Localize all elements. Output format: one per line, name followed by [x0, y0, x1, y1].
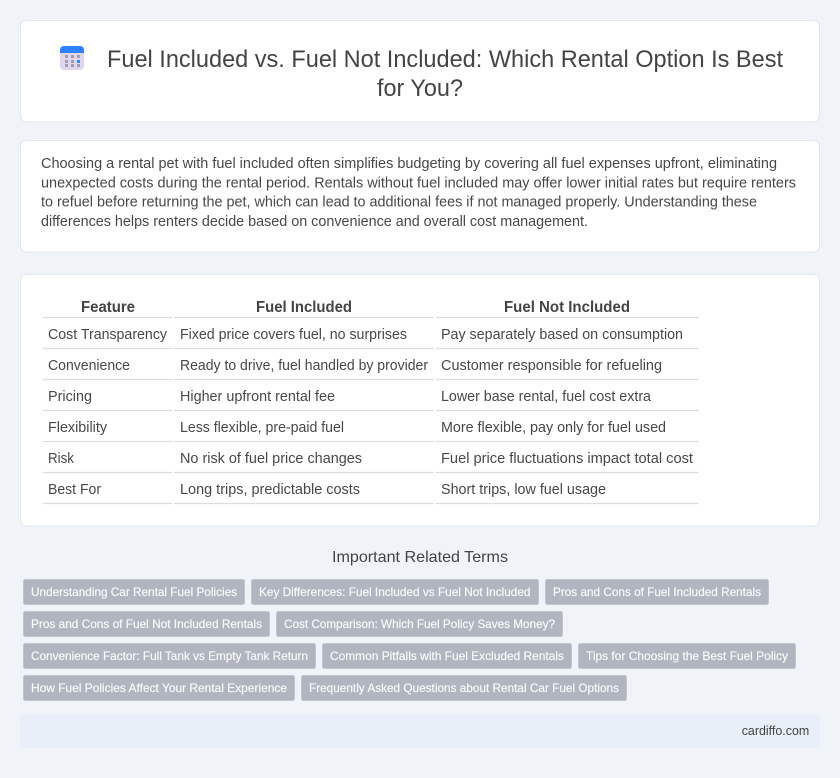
row: pricing: Pricing: [48, 389, 92, 405]
text block: intro: [41, 156, 796, 230]
row: best for: Short trips, low fuel usage: [441, 482, 606, 498]
row: best for: [48, 482, 606, 498]
footer bar: [20, 714, 820, 748]
row: pricing: Lower base rental, fuel cost extra: [441, 389, 651, 405]
row: pricing: Higher upfront rental fee: [180, 389, 335, 405]
tag: Cost Comparison: Which Fuel Policy Saves Money?: [284, 617, 555, 631]
row: flexibility: Flexibility: [48, 420, 108, 436]
row: risk: No risk of fuel price changes: [180, 451, 362, 467]
table header: Fuel Included: [256, 299, 352, 316]
row: flexibility: More flexible, pay only for fuel used: [441, 420, 666, 436]
panel: intro paragraph: [20, 140, 820, 252]
text block: intro: differences helps renters decide based on convenience and overall cost management.: [41, 214, 588, 230]
row: convenience: [48, 358, 662, 374]
title: for You?: [377, 75, 463, 102]
panel: related term tags: [24, 580, 796, 700]
tag: Frequently Asked Questions about Rental Car Fuel Options: [309, 681, 619, 695]
row: flexibility: Less flexible, pre-paid fuel: [180, 420, 344, 436]
row: best for: Long trips, predictable costs: [180, 482, 360, 498]
tag: [302, 676, 626, 700]
row: cost transparency: Fixed price covers fuel, no surprises: [180, 327, 407, 343]
panel: comparison table: [20, 274, 820, 526]
tag: Understanding Car Rental Fuel Policies: [31, 585, 237, 599]
row: cost transparency: [48, 327, 683, 343]
tag: [276, 612, 562, 636]
table header: Feature: [81, 299, 135, 316]
row: cost transparency: Pay separately based on consumption: [441, 327, 683, 343]
row: pricing: [48, 389, 651, 405]
heading: important related terms: Important Related Terms: [332, 549, 508, 566]
row: risk: Fuel price fluctuations impact total cost: [441, 451, 693, 467]
text block: intro: unexpected costs during the rental period. Rentals without fuel included may offer lower initial rates but require renters: [41, 176, 796, 192]
tag: Convenience Factor: Full Tank vs Empty Tank Return: [31, 649, 308, 663]
tag: [24, 676, 294, 700]
text block: intro: to refuel before returning the pet, which can lead to additional fees if not managed properly. Understanding these: [41, 194, 757, 210]
row: flexibility: [48, 420, 666, 436]
footer bar: cardiffo.com: [742, 723, 809, 738]
row: risk: [48, 451, 693, 467]
tag: Pros and Cons of Fuel Included Rentals: [553, 585, 761, 599]
tag: [24, 580, 244, 604]
tag: Pros and Cons of Fuel Not Included Rentals: [31, 617, 262, 631]
tag: Tips for Choosing the Best Fuel Policy: [586, 649, 788, 663]
tag: [546, 580, 768, 604]
tag: [322, 644, 572, 668]
row: best for: Best For: [48, 482, 101, 498]
title: [107, 46, 783, 102]
tag: How Fuel Policies Affect Your Rental Experience: [31, 681, 287, 695]
text block: intro: Choosing a rental pet with fuel included often simplifies budgeting by covering all fuel expenses upfront, eliminating: [41, 156, 777, 172]
icon: calendar: [60, 46, 84, 70]
tag: [252, 580, 538, 604]
row: convenience: Ready to drive, fuel handled by provider: [180, 358, 428, 374]
table header: Fuel Not Included: [504, 299, 630, 316]
row: convenience: Customer responsible for refueling: [441, 358, 662, 374]
row: risk: Risk: [48, 451, 75, 467]
tag: [24, 612, 270, 636]
panel: title header: [20, 20, 820, 122]
tag: [24, 644, 316, 668]
tag: [578, 644, 796, 668]
table header: [81, 299, 630, 316]
tag: Key Differences: Fuel Included vs Fuel Not Included: [259, 585, 530, 599]
row: cost transparency: Cost Transparency: [48, 327, 168, 343]
row: convenience: Convenience: [48, 358, 130, 374]
tag: Common Pitfalls with Fuel Excluded Rentals: [330, 649, 564, 663]
title: Fuel Included vs. Fuel Not Included: Which Rental Option Is Best: [107, 46, 783, 73]
